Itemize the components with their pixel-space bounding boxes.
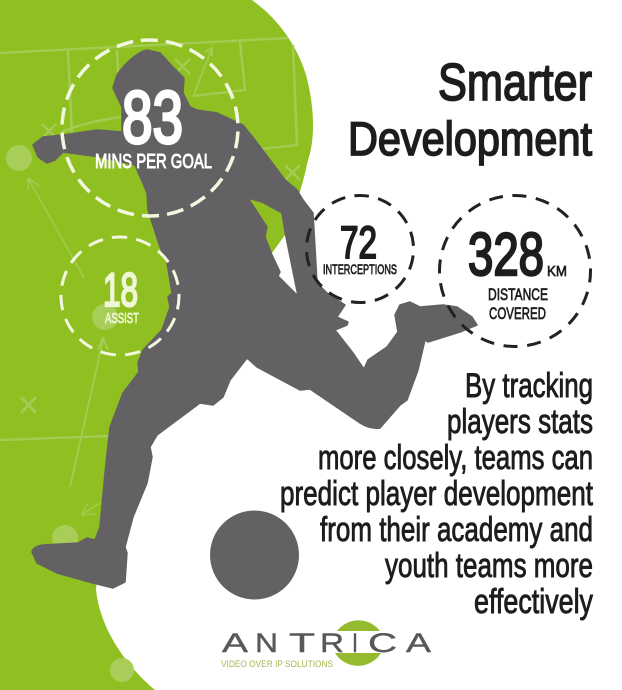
stat: 72 interceptions xyxy=(301,190,419,308)
logo: Antrica: VIDEO OVER IP SOLUTIONS xyxy=(221,659,333,670)
tactics board pitch markings xyxy=(0,38,300,515)
logo: Antrica: A xyxy=(222,628,248,658)
logo: Antrica xyxy=(221,620,431,670)
stat: 72 interceptions: 72 xyxy=(340,217,377,268)
stat: 328 km distance covered xyxy=(437,193,593,349)
logo: Antrica: R xyxy=(320,628,344,658)
logo: Antrica: N xyxy=(255,628,278,658)
green background panel xyxy=(0,0,313,690)
stat: 328 km distance covered: COVERED xyxy=(489,304,546,323)
title xyxy=(348,54,592,165)
stat: 83 mins per goal: MINS PER GOAL xyxy=(95,151,212,173)
logo: Antrica: I xyxy=(352,628,358,658)
stat: 18 assist xyxy=(53,229,187,363)
title: Development xyxy=(348,112,592,165)
stat: 18 assist: 18 xyxy=(103,263,138,316)
stat: 328 km distance covered: KM xyxy=(547,263,567,280)
stat: 83 mins per goal: 83 xyxy=(122,76,183,159)
stat: 72 interceptions: INTERCEPTIONS xyxy=(323,262,397,277)
body paragraph xyxy=(280,367,593,621)
stat: 328 km distance covered: 328 xyxy=(468,221,544,288)
body paragraph: effectively xyxy=(474,583,593,621)
logo: Antrica: T xyxy=(289,628,315,658)
stat: 18 assist: ASSIST xyxy=(105,311,139,327)
pitch player markers xyxy=(6,145,134,682)
logo: Antrica: A xyxy=(406,628,431,658)
logo: Antrica: C xyxy=(368,628,397,658)
title: Smarter xyxy=(438,54,592,112)
football player silhouette xyxy=(32,50,477,588)
football xyxy=(210,510,299,600)
stat: 328 km distance covered: DISTANCE xyxy=(488,285,548,304)
stat: 83 mins per goal xyxy=(53,31,247,225)
